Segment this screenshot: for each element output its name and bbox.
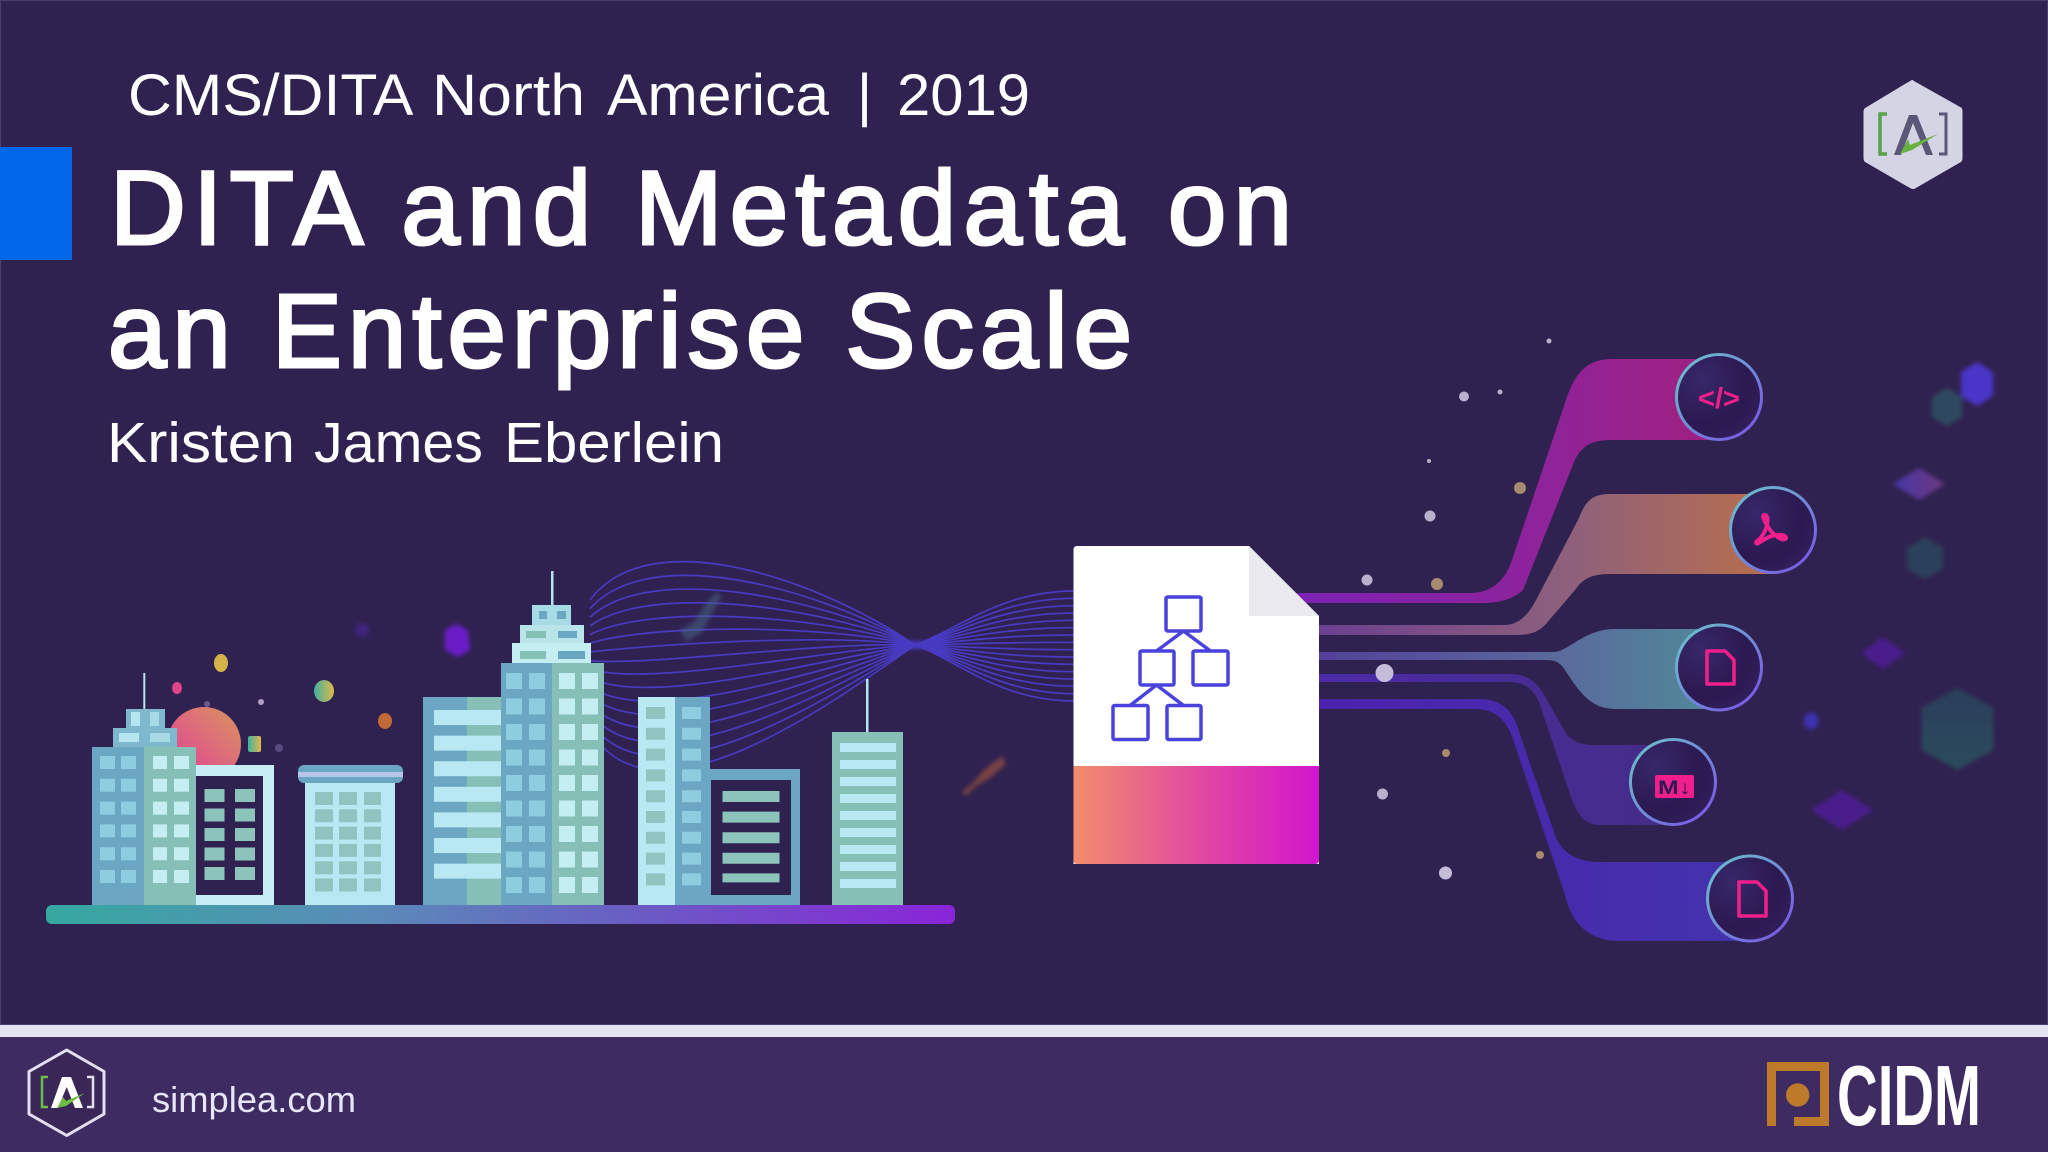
logo: footer hexagon [29, 1050, 104, 1136]
floating hexagons right [1804, 362, 1994, 830]
event heading: North [432, 63, 585, 128]
output node: pdf [1730, 488, 1816, 572]
light divider band [0, 1025, 2048, 1037]
event heading: | [857, 63, 872, 128]
event heading: 2019 [897, 63, 1030, 128]
sun behind skyline [167, 707, 241, 781]
building 1 tower [92, 673, 196, 905]
city skyline [46, 571, 955, 924]
event heading: CMS/DITA [128, 63, 414, 128]
blue accent bar [0, 147, 72, 260]
title: an Enterprise Scale [108, 273, 1132, 390]
ribbon: code output [1297, 359, 1719, 603]
ribbon: markdown output [1319, 674, 1673, 825]
logo: top right hexagon [1864, 80, 1962, 188]
ground platform [46, 905, 955, 924]
footer bar [0, 1037, 2048, 1152]
building 5 main tower [501, 571, 604, 905]
ribbon: second document output [1319, 699, 1750, 941]
document icon [1074, 546, 1319, 864]
author: James [314, 411, 483, 475]
author: Eberlein [504, 411, 724, 475]
output node: document [1676, 625, 1762, 710]
output node: markdown: M↓ [1658, 778, 1691, 799]
event heading: America [607, 63, 830, 128]
title [108, 150, 1292, 390]
output node: second document [1708, 856, 1792, 941]
hierarchy diagram [1113, 597, 1228, 740]
building 8 antenna block [832, 679, 903, 905]
signal wave lines [590, 562, 1075, 770]
building 4 wide [423, 697, 501, 905]
building 6 slim [638, 697, 710, 905]
logo: CIDM: CIDM [1837, 1049, 1981, 1144]
logo: CIDM [1767, 1049, 1981, 1144]
floating shapes over city [172, 592, 1006, 796]
output node: code [1676, 354, 1762, 440]
building 7 framed [710, 769, 800, 905]
ribbon: document output [1319, 629, 1719, 709]
particles [1362, 338, 1552, 880]
building 2 framed [196, 765, 274, 905]
building 3 capped [298, 765, 403, 905]
title: DITA and Metadata on [110, 150, 1292, 267]
output node: code: </> [1698, 383, 1740, 415]
ribbon: pdf output [1319, 494, 1773, 635]
output node: markdown [1630, 740, 1716, 824]
author: Kristen [107, 411, 295, 475]
footer link: simplea.com [152, 1079, 356, 1120]
